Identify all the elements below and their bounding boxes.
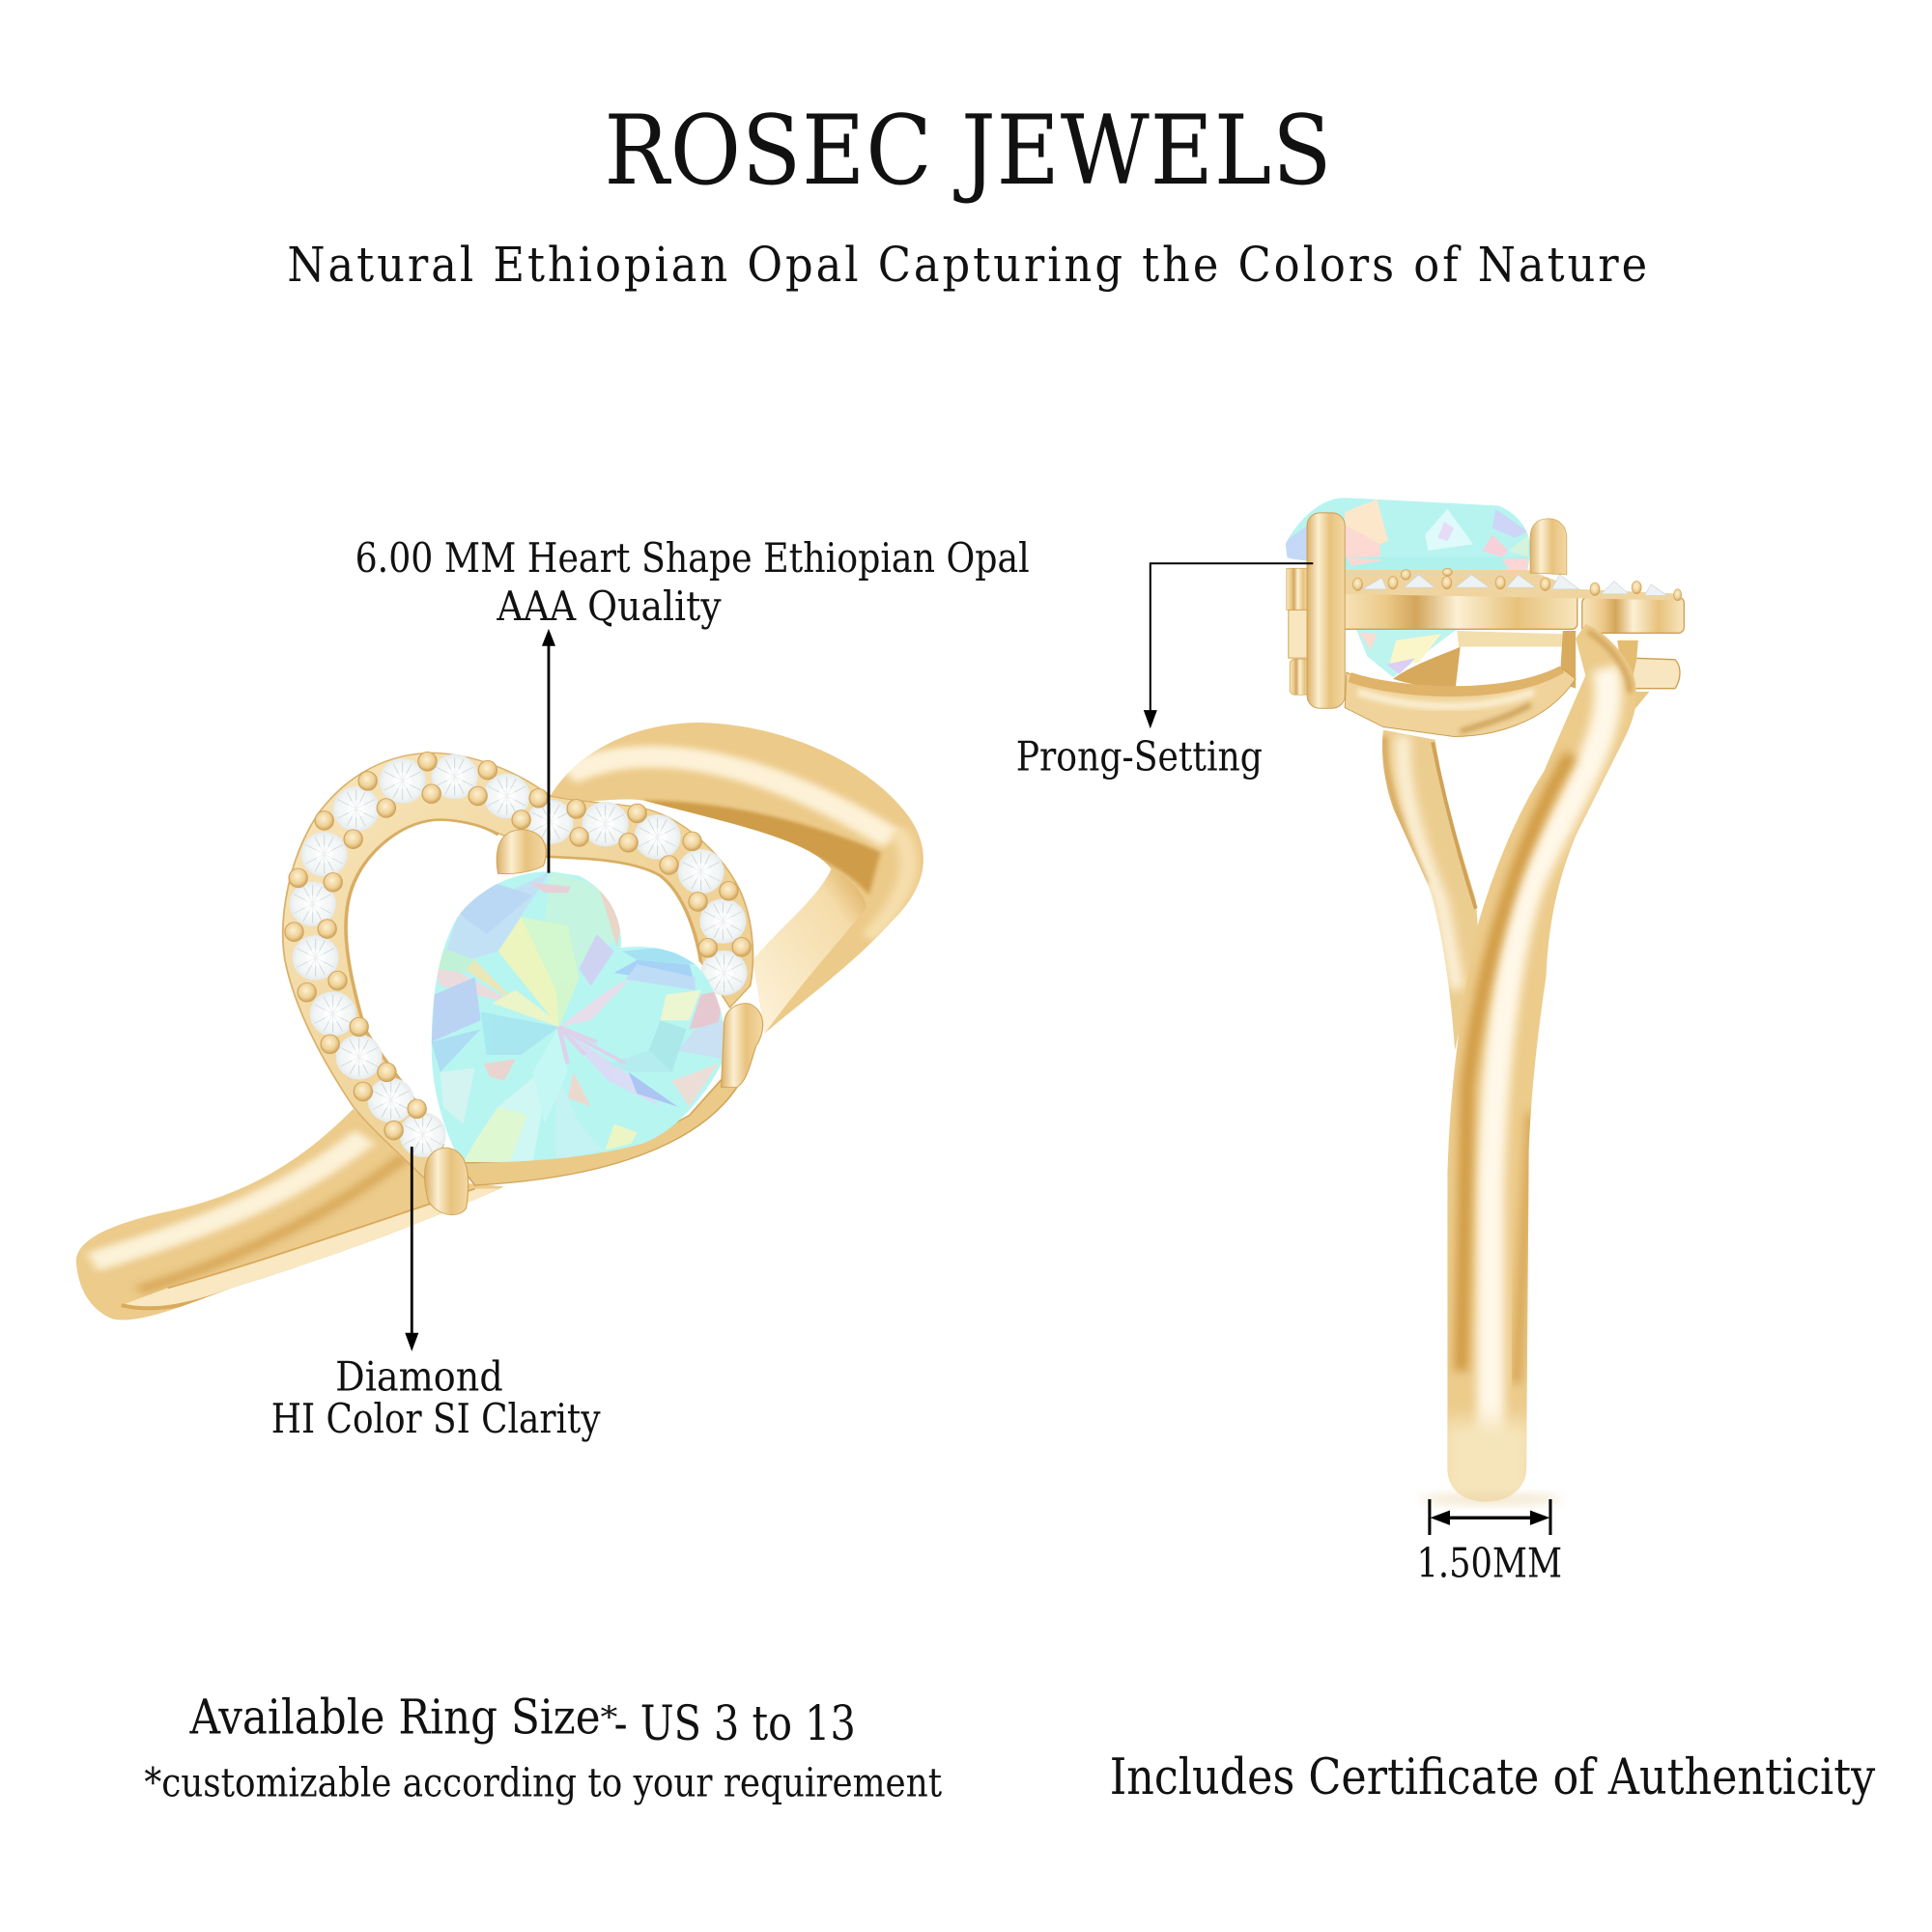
dimension marker: band width [1430,1499,1550,1535]
callout: opal label [355,534,1030,630]
side beads [1353,568,1682,601]
heart opal gemstone [423,865,736,1167]
prong: left tall [1307,513,1345,708]
subtitle: Natural Ethiopian Opal Capturing the Colors of Nature [287,237,1647,293]
gem basket band [458,1076,737,1185]
front shank of side ring [1419,624,1636,1513]
right ring: side view head [1281,493,1684,736]
back shank of side ring [1382,730,1478,1050]
prong: top [497,830,546,874]
callout: opal label: AAA Quality [496,582,722,630]
ring size note: Available Ring Size [189,1690,601,1746]
title: ROSEC JEWELS [604,96,1331,207]
front shank shading [1441,631,1630,1513]
callout: prong setting arrow [1144,563,1313,728]
side diamonds [1362,575,1667,595]
halo inner rim [346,820,701,1146]
callout: diamond label [271,1353,601,1442]
base shadow [1419,1493,1562,1505]
opal gem pavilion [1356,629,1457,677]
ring size note: - US 3 to 13 [614,1695,856,1751]
callout: opal label: 6.00 MM Heart Shape Ethiopian Opal [355,534,1030,582]
prong: right [722,1004,763,1088]
ring size note [189,1690,856,1751]
callout: diamond label: HI Color SI Clarity [271,1395,601,1442]
callout: diamond arrow [405,1147,418,1351]
back setting block [1287,568,1310,695]
ring lower shank [76,1109,504,1320]
callout: opal arrow [542,629,555,873]
halo diamonds [290,754,748,1157]
customization note: *customizable according to your requirement [144,1760,943,1806]
callout: diamond label: Diamond [335,1353,503,1401]
prong: bottom [425,1148,469,1215]
basket lower pieces [1345,631,1680,736]
left ring: front view [76,723,923,1320]
ring upper band [551,723,923,1034]
heart halo frame [283,753,753,1182]
opal gem crown [1285,497,1530,570]
halo beads [285,752,751,1140]
ring size note: * [601,1701,617,1735]
prong: right short [1530,519,1567,575]
side halo bar [1337,570,1684,633]
callout: prong setting label: Prong-Setting [1016,733,1263,781]
dimension label: 1.50MM [1416,1539,1562,1586]
